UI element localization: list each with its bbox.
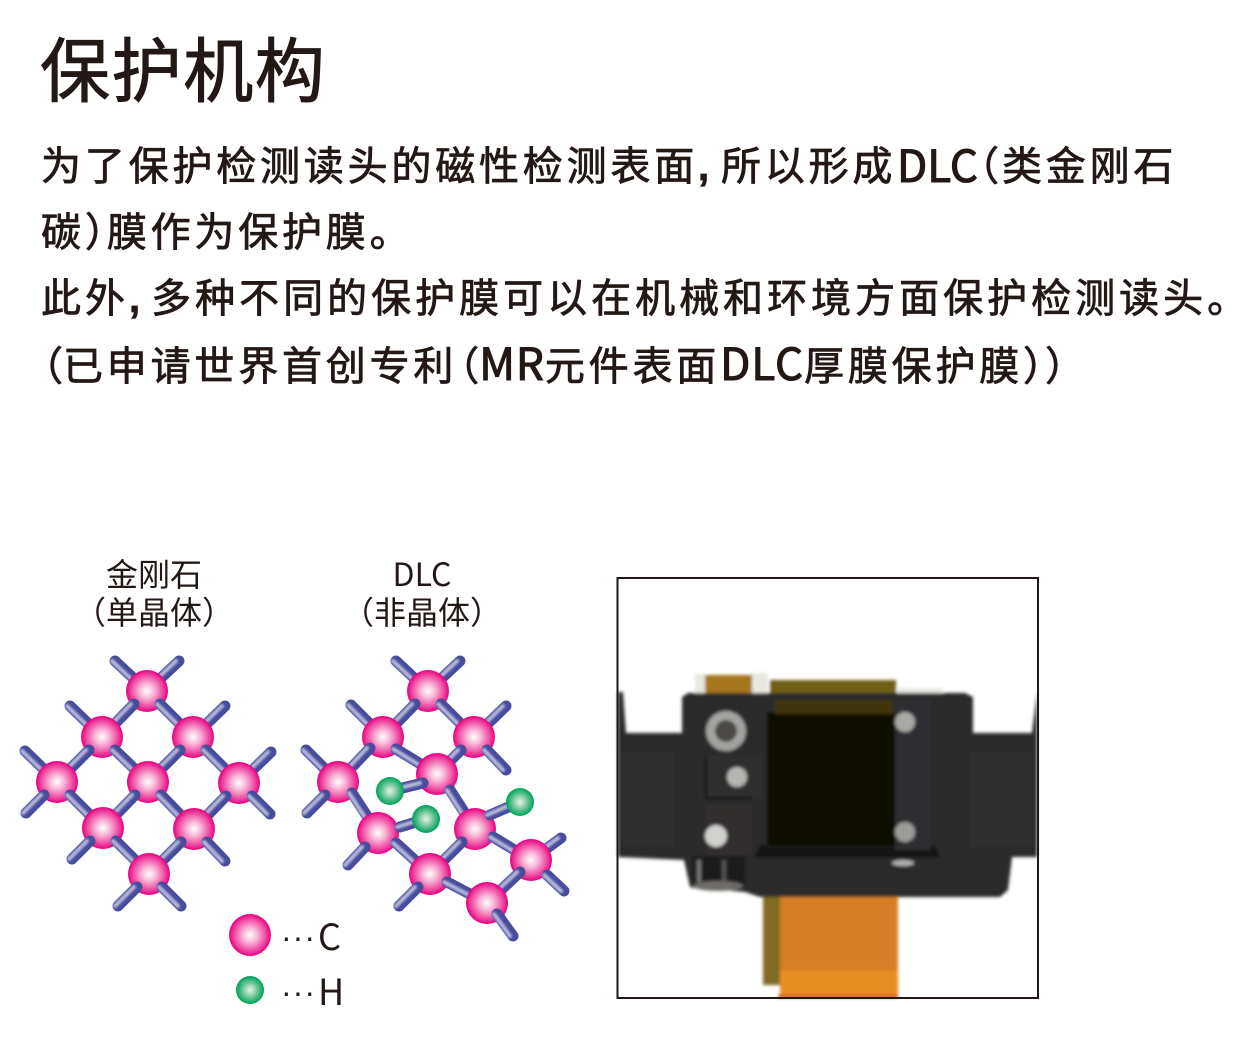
legend: carbon [229, 909, 341, 961]
label: DLC: （非晶体） [342, 588, 502, 634]
photo: magnetic read head [618, 578, 1038, 998]
label: diamond: （单晶体） [74, 588, 234, 634]
label: DLC: DLC [393, 550, 451, 596]
text block: description: 碳）膜作为保护膜。 [41, 200, 413, 258]
body bar [618, 692, 1037, 897]
legend: hydrogen [236, 964, 344, 1016]
legend: carbon: ··· [281, 919, 316, 955]
label: diamond: 金刚石 [106, 550, 202, 596]
diagram: DLC amorphous structure [303, 661, 564, 936]
legend: hydrogen: H [318, 964, 344, 1016]
text block: description [23, 131, 1240, 393]
text block: description: DLC [897, 131, 978, 195]
label: diamond [74, 550, 234, 634]
text block: description: 类金刚石 [1002, 134, 1177, 192]
text block: description: 为了保护检测读头的磁性检测表面, [41, 134, 709, 192]
text block: description: 此外, 多种不同的保护膜可以在机械和环境方面保护检测读头。 [41, 266, 1240, 324]
screw and pins [706, 711, 746, 751]
label: DLC [342, 550, 502, 634]
text block: description: （已申请世界首创专利（MR元件表面DLC厚膜保护膜）） [23, 329, 1085, 393]
text block: description: 所以形成 [721, 134, 896, 192]
diagram: diamond crystal lattice [22, 661, 271, 906]
legend: carbon: C [318, 909, 341, 961]
title: 保护机构 [40, 16, 326, 117]
text block: description: （ [959, 134, 1003, 192]
photo frame [618, 578, 1038, 998]
legend: hydrogen: ··· [281, 974, 316, 1010]
sensor window [767, 712, 895, 845]
flex cable [763, 895, 783, 985]
cylinder [692, 856, 745, 888]
top tabs [695, 674, 707, 698]
